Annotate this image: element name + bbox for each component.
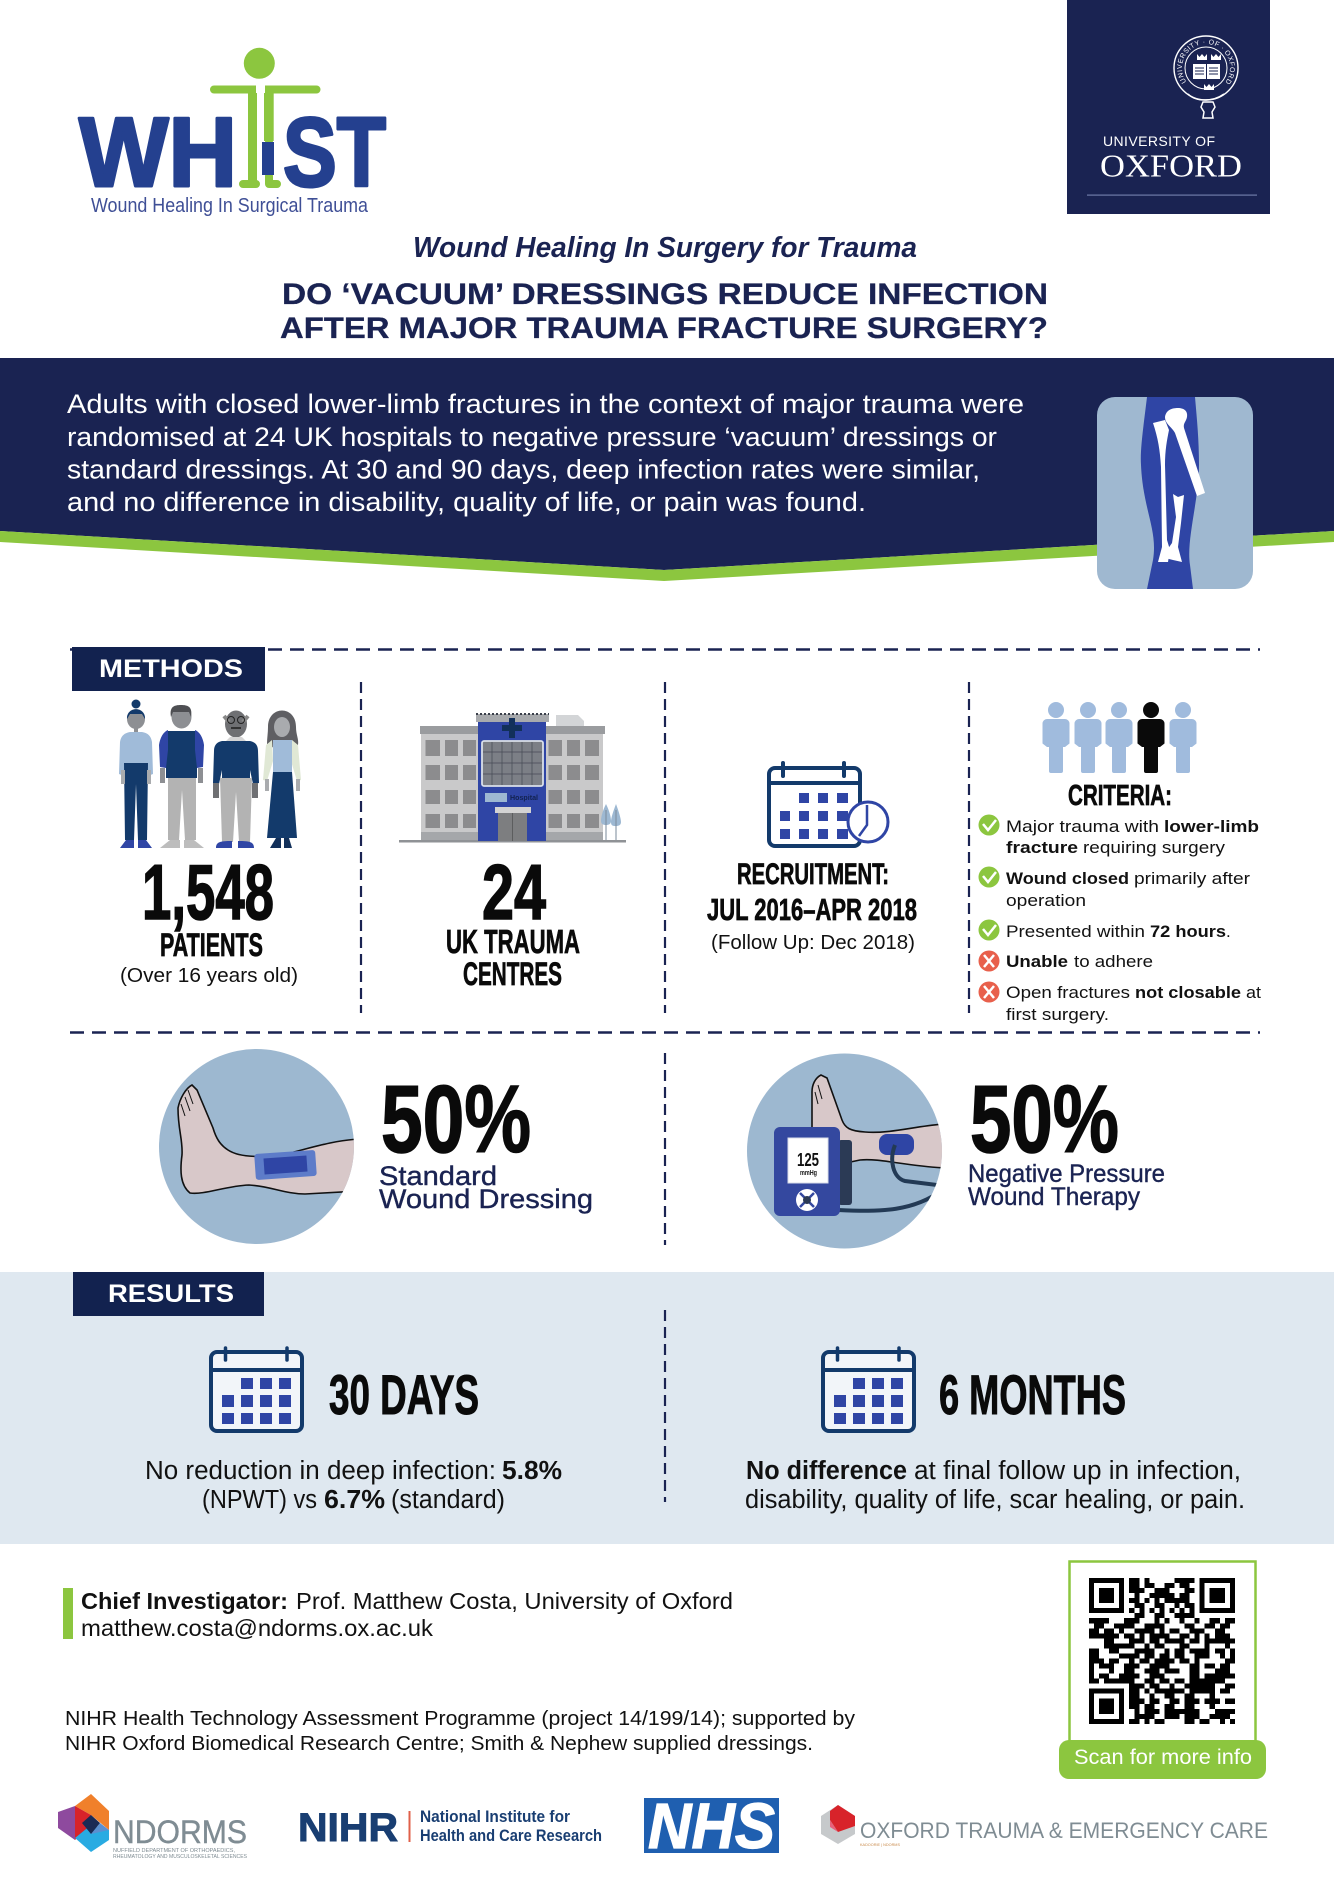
criteria list: to adhere [1074, 952, 1153, 971]
logo: NIHR [298, 1806, 602, 1850]
criteria list: Unable [1006, 952, 1068, 971]
logo: NDORMS: RHEUMATOLOGY AND MUSCULOSKELETAL SCIENCES [113, 1854, 247, 1860]
title: AFTER MAJOR TRAUMA FRACTURE SURGERY? [280, 312, 1048, 345]
icon: leg with pressure device [747, 1054, 945, 1248]
logo: NDORMS: NUFFIELD DEPARTMENT OF ORTHOPAEDICS, [113, 1848, 235, 1854]
criteria list: requiring surgery [1083, 838, 1226, 857]
result text: 6 months: at final follow up in infection, [914, 1457, 1241, 1485]
subtitle: Wound Healing In Surgery for Trauma [413, 232, 917, 264]
icon: calendar 30 days [211, 1348, 302, 1431]
stat: 50 percent NPWT: 50% [970, 1066, 1119, 1173]
icon: fractured leg [1097, 397, 1253, 589]
centres label: CENTRES [463, 956, 562, 992]
patients note: (Over 16 years old) [120, 964, 298, 987]
result text: 30 days: (standard) [391, 1486, 505, 1514]
label: negative pressure wound therapy: Wound Therapy [968, 1183, 1140, 1211]
result text: 30 days: 5.8% [502, 1457, 562, 1485]
criteria list: fracture [1006, 838, 1078, 857]
funding note: NIHR Health Technology Assessment Programme (project 14/199/14); supported by [65, 1707, 856, 1730]
contact block: matthew.costa@ndorms.ox.ac.uk [81, 1615, 434, 1641]
icon: four patients [119, 700, 301, 848]
logo: Oxford Trauma and Emergency Care: KADOORIE | NDORMS [860, 1842, 900, 1847]
logo: WHIST [79, 48, 386, 217]
icon: leg with pressure device: 125 [797, 1150, 819, 1170]
patients count: 1,548 [142, 848, 274, 936]
logo: NDORMS [58, 1794, 247, 1860]
criteria list [1006, 817, 1261, 1024]
logo: WHIST: ST [283, 97, 386, 207]
recruitment heading: RECRUITMENT: [737, 858, 889, 891]
logo: University of Oxford: OXFORD [1100, 148, 1242, 184]
criteria heading: CRITERIA: [1068, 780, 1172, 812]
title: DO ‘VACUUM’ DRESSINGS REDUCE INFECTION [282, 278, 1048, 311]
result text: 6 months [745, 1457, 1245, 1514]
stat: 50 percent standard: 50% [381, 1066, 531, 1173]
funding note: NIHR Oxford Biomedical Research Centre; Smith & Nephew supplied dressings. [65, 1732, 813, 1755]
criteria list: Open fractures [1006, 983, 1130, 1002]
criteria list: primarily after [1134, 869, 1250, 888]
criteria list: Major trauma with [1006, 817, 1159, 836]
result text: 6 months: disability, quality of life, scar healing, or pain. [745, 1486, 1245, 1514]
label: standard wound dressing [379, 1161, 593, 1214]
logo: WHIST: WH [79, 97, 237, 207]
logo: NHS: NHS [648, 1790, 775, 1862]
panel: recruitment [707, 763, 917, 954]
QR code [1089, 1581, 1235, 1721]
funding note [65, 1707, 856, 1755]
logo: NIHR: Health and Care Research [420, 1827, 602, 1845]
logo: NIHR: NIHR [298, 1806, 398, 1850]
criteria list: first surgery. [1006, 1005, 1109, 1024]
heading: 30 days: 30 DAYS [329, 1363, 479, 1426]
heading: methods: METHODS [99, 655, 243, 683]
criteria list: operation [1006, 891, 1086, 910]
icon: hospital: Hospital [510, 793, 538, 802]
title [280, 278, 1048, 345]
logo: University of Oxford: UNIVERSITY OF [1103, 133, 1215, 149]
panel: summary band [0, 358, 1334, 589]
label: negative pressure wound therapy [968, 1160, 1165, 1211]
criteria list: Presented within [1006, 922, 1145, 941]
contact block [63, 1588, 733, 1641]
criteria list: lower-limb [1164, 817, 1259, 836]
heading: results: RESULTS [108, 1280, 234, 1308]
criteria list: at [1246, 983, 1261, 1002]
panel: patients [119, 700, 301, 987]
follow-up note: (Follow Up: Dec 2018) [711, 931, 915, 954]
icons: include and exclude marks [978, 814, 1000, 1002]
icon: hospital [399, 714, 626, 842]
summary text: and no difference in disability, quality of life, or pain was found. [67, 487, 866, 517]
result text: 30 days: No reduction in deep infection: [145, 1457, 496, 1485]
panel: criteria [978, 702, 1261, 1024]
summary text [67, 389, 1024, 517]
criteria list: 72 hours [1150, 922, 1226, 941]
result text: 30 days [145, 1457, 562, 1514]
logo: NIHR: National Institute for [420, 1808, 571, 1826]
icon: leg with standard dressing [159, 1049, 360, 1244]
logo: Oxford Trauma and Emergency Care [821, 1805, 1268, 1847]
logo: University of Oxford: UNIVERSITY · OF · OXFORD [1177, 40, 1235, 84]
heading: results [73, 1272, 264, 1316]
criteria list: not closable [1135, 983, 1241, 1002]
result text: 30 days: (NPWT) vs [202, 1486, 317, 1514]
panel: results [0, 1272, 1334, 1544]
summary text: Adults with closed lower-limb fractures in the context of major trauma were [67, 389, 1024, 419]
recruitment heading: JUL 2016–APR 2018 [707, 892, 917, 927]
logo: University of Oxford [1067, 0, 1270, 214]
recruitment heading [707, 858, 917, 927]
label: standard wound dressing: Wound Dressing [379, 1184, 593, 1214]
result text: 6 months: No difference [746, 1457, 907, 1485]
icon: leg with pressure device: mmHg [800, 1170, 817, 1177]
panel: negative pressure arm [747, 1054, 1165, 1248]
QR code callout [1059, 1562, 1266, 1779]
QR caption: Scan for more info [1074, 1746, 1252, 1769]
panel: standard dressing arm [159, 1049, 593, 1244]
QR caption [1059, 1740, 1266, 1779]
icon: five people [1042, 702, 1196, 773]
icon: calendar and clock [769, 763, 888, 846]
methods frame: dashed dividers [70, 650, 1260, 1245]
summary text: standard dressings. At 30 and 90 days, deep infection rates were similar, [67, 454, 980, 484]
result text: 30 days: 6.7% [324, 1486, 385, 1514]
criteria list: . [1226, 922, 1231, 941]
contact block: Prof. Matthew Costa, University of Oxford [296, 1588, 733, 1614]
panel: trauma centres [399, 714, 626, 992]
centres label [446, 923, 580, 992]
contact block: Chief Investigator: [81, 1588, 288, 1614]
logo: NDORMS: NDORMS [113, 1814, 247, 1850]
logo: WHIST: Wound Healing In Surgical Trauma [91, 195, 369, 217]
centres count: 24 [482, 848, 546, 936]
label: negative pressure wound therapy: Negative Pressure [968, 1160, 1165, 1188]
criteria list: Wound closed [1006, 869, 1129, 888]
heading: methods [72, 647, 265, 691]
centres label: UK TRAUMA [446, 923, 580, 960]
patients label: PATIENTS [160, 927, 263, 963]
icon: calendar 6 months [823, 1348, 914, 1431]
label: standard wound dressing: Standard [379, 1161, 497, 1191]
heading: 6 months: 6 MONTHS [939, 1363, 1126, 1426]
logo: Oxford Trauma and Emergency Care: OXFORD TRAUMA & EMERGENCY CARE [860, 1818, 1268, 1843]
summary text: randomised at 24 UK hospitals to negative pressure ‘vacuum’ dressings or [67, 422, 997, 452]
